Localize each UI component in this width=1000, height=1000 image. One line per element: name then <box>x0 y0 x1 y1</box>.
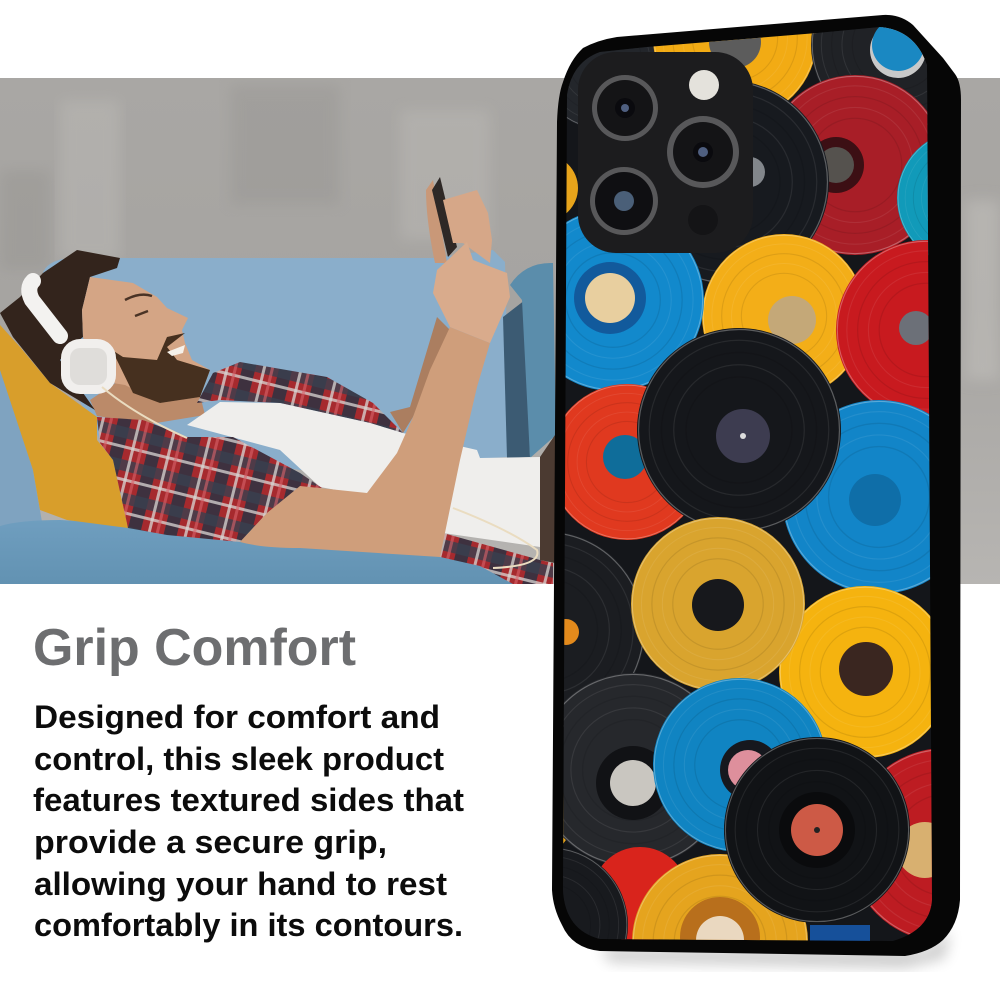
sensor <box>688 205 718 235</box>
head <box>0 250 210 410</box>
disc: red right <box>836 240 1000 420</box>
disc: yellow bottom <box>632 854 808 1000</box>
disc: black upper left <box>566 44 672 124</box>
disc: blue lower <box>653 678 827 852</box>
phone shadow <box>600 930 950 968</box>
far arm <box>390 317 450 433</box>
hand holding phone <box>426 177 510 343</box>
disc: gold centre <box>631 517 805 691</box>
disc: black front <box>724 737 910 923</box>
camera module <box>578 52 753 253</box>
disc: blue right centre <box>782 400 976 594</box>
description text: allowing your hand to rest <box>34 866 447 902</box>
ear cup <box>61 339 116 394</box>
sofa back cushion <box>43 250 510 470</box>
disc: blue left <box>522 209 704 391</box>
lens right <box>667 116 739 188</box>
disc: red top <box>790 75 928 255</box>
case body <box>552 15 961 956</box>
face <box>82 277 210 403</box>
near arm <box>240 327 490 557</box>
disc: yellow lower left sliver <box>497 780 573 856</box>
phone case product <box>552 14 961 956</box>
thumb and palm behind phone <box>426 180 447 263</box>
plaid sleeve <box>97 417 322 542</box>
sofa seat <box>0 520 515 584</box>
lifestyle photo: man on sofa <box>0 78 1000 584</box>
disc: black lower left <box>536 673 730 867</box>
disc: red bottom <box>592 847 688 943</box>
disc: yellow left sliver <box>566 163 578 214</box>
vinyl artwork <box>563 27 932 941</box>
lens top left <box>592 75 658 141</box>
description text: features textured sides that <box>33 782 464 818</box>
plaid shirt hem <box>440 533 553 584</box>
disc: black bottom left <box>472 847 628 1000</box>
hair <box>0 250 120 410</box>
disc: yellow centre <box>702 234 866 398</box>
disc: red left <box>549 384 705 540</box>
disc: black top right <box>811 27 928 125</box>
disc: black top centre <box>625 80 829 284</box>
concrete wall <box>0 78 1000 584</box>
eye and brow <box>125 295 152 316</box>
sofa arm <box>0 368 42 526</box>
white t-shirt <box>187 402 540 547</box>
disc: yellow top <box>654 33 816 100</box>
smile <box>167 345 185 356</box>
fingers <box>443 190 492 263</box>
shirt collar and chest plaid <box>197 362 403 433</box>
description text: control, this sleek product <box>34 741 444 777</box>
right cushion <box>510 263 556 458</box>
disc: yellow right <box>779 586 951 758</box>
lens bottom left <box>590 167 658 235</box>
earphone cable <box>102 387 537 568</box>
blue sliver bottom <box>810 925 870 941</box>
heading: Grip Comfort <box>33 619 356 677</box>
mustard pillow <box>0 325 128 528</box>
smartphone <box>432 177 457 257</box>
fist <box>433 242 510 343</box>
disc: red lower right <box>848 748 1000 942</box>
neck <box>90 380 205 424</box>
white headphones <box>29 281 116 394</box>
headband <box>29 281 60 336</box>
belt and jeans <box>540 435 555 563</box>
description text: provide a secure grip, <box>34 824 387 860</box>
disc: black left <box>447 531 645 729</box>
sofa <box>0 250 556 584</box>
description text: Designed for comfort and <box>34 699 440 735</box>
disc: black centre <box>637 328 841 532</box>
flash <box>689 70 719 100</box>
description text <box>33 699 464 943</box>
description text: comfortably in its contours. <box>34 907 463 943</box>
dark gap between cushions <box>503 300 530 458</box>
disc: teal upper right <box>897 141 928 256</box>
beard <box>112 333 210 403</box>
